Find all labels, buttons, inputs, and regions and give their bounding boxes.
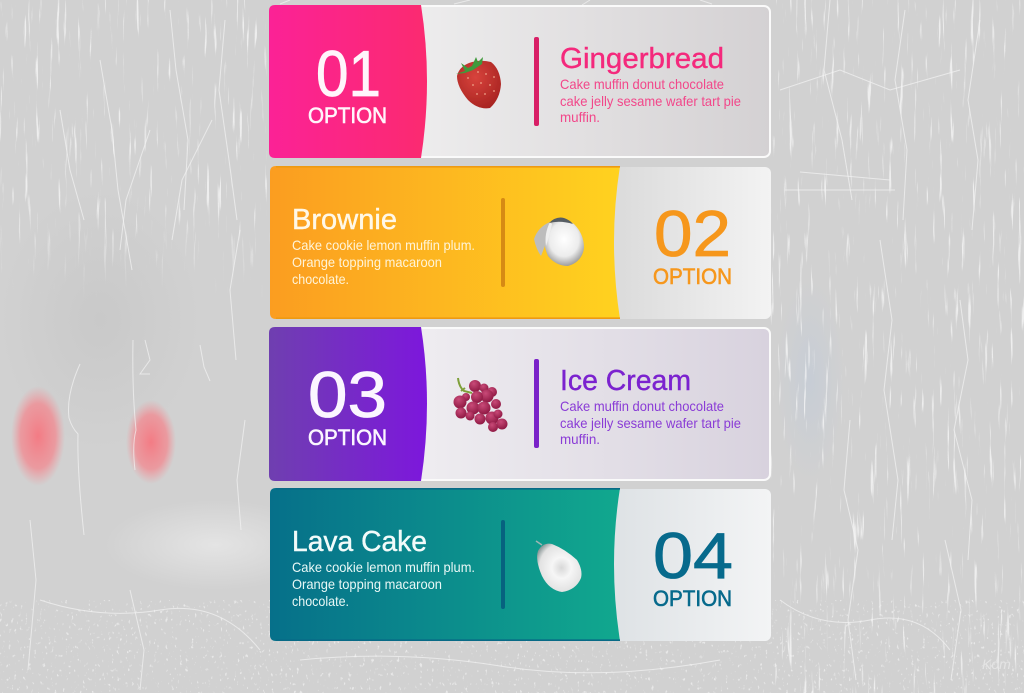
- label option: OPTION: [653, 264, 732, 289]
- colour tab 03: [269, 327, 427, 481]
- heading Brownie: Brownie: [292, 204, 397, 236]
- label option: OPTION: [308, 425, 387, 450]
- description: Cake muffin donut chocolate: [560, 398, 724, 414]
- description: Cake cookie lemon muffin plum.: [292, 237, 475, 253]
- description: Orange topping macaroon: [292, 576, 442, 592]
- colour tab 02: [270, 166, 620, 319]
- heading Lava Cake: Lava Cake: [292, 526, 427, 558]
- description: [560, 398, 741, 447]
- number 01: 01: [316, 37, 381, 110]
- colour tab 01: [269, 5, 427, 158]
- icon: strawberry: [456, 57, 501, 108]
- number 03: 03: [308, 358, 387, 431]
- number 02: 02: [654, 197, 731, 270]
- description: muffin.: [560, 431, 600, 447]
- icon: pear: [536, 541, 582, 592]
- description: muffin.: [560, 109, 600, 125]
- description: cake jelly sesame wafer tart pie: [560, 415, 741, 431]
- divider bar: [501, 520, 505, 609]
- label option: OPTION: [653, 586, 732, 611]
- panel: option 04 Lava Cake: [270, 488, 771, 641]
- description: Cake muffin donut chocolate: [560, 76, 724, 92]
- description: [560, 76, 741, 125]
- description: Cake cookie lemon muffin plum.: [292, 559, 475, 575]
- colour tab 04: [270, 488, 620, 641]
- background: faded concert photo with streaks: Kom: [982, 656, 1011, 672]
- divider bar: [534, 359, 539, 448]
- label option: OPTION: [308, 103, 387, 128]
- heading Gingerbread: Gingerbread: [560, 43, 724, 75]
- description: cake jelly sesame wafer tart pie: [560, 93, 741, 109]
- icon: lemon: [534, 218, 584, 266]
- divider bar: [501, 198, 505, 287]
- heading Ice Cream: Ice Cream: [560, 365, 691, 397]
- number 04: 04: [653, 519, 733, 592]
- description: [292, 237, 475, 287]
- description: chocolate.: [292, 593, 349, 609]
- description: chocolate.: [292, 271, 349, 287]
- panel: option 02 Brownie: [270, 166, 771, 319]
- description: [292, 559, 475, 609]
- icon: grapes: [454, 378, 508, 432]
- panel: option 03 Ice Cream: [269, 327, 770, 481]
- description: Orange topping macaroon: [292, 254, 442, 270]
- panel: option 01 Gingerbread: [269, 5, 770, 158]
- divider bar: [534, 37, 539, 126]
